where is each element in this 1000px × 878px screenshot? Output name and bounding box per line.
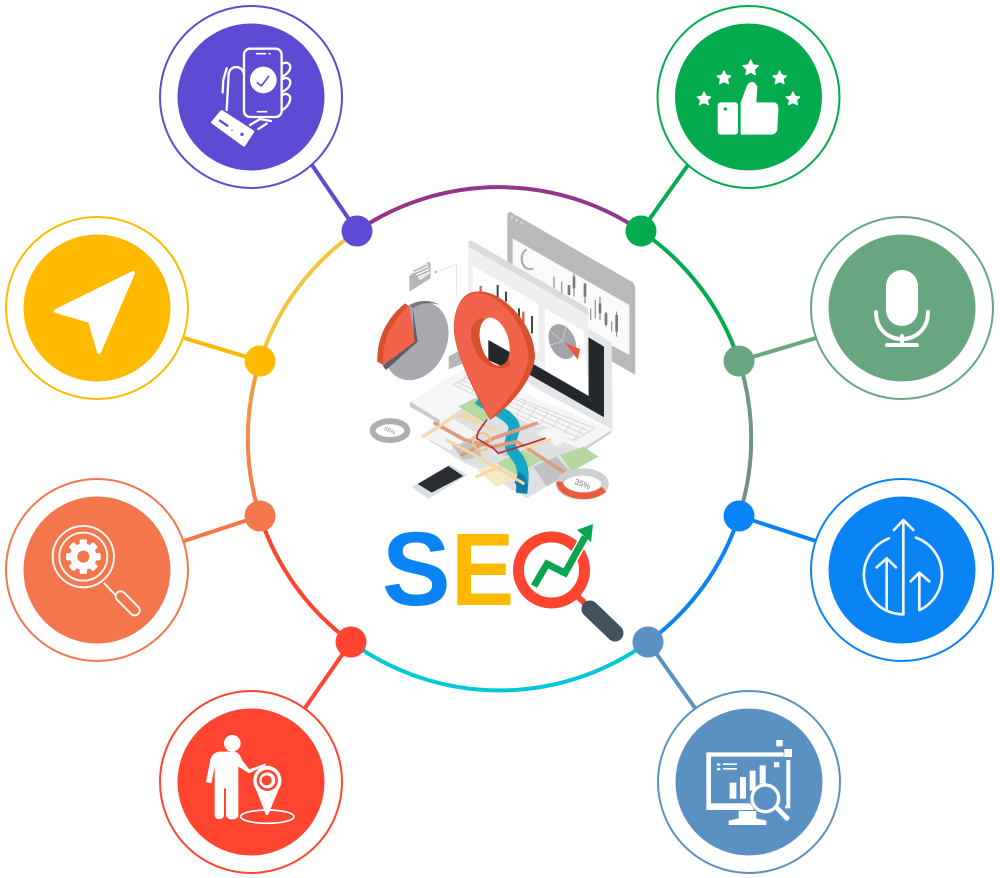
icon: person touching a map pin: [206, 735, 294, 823]
icon: microphone: [876, 270, 928, 345]
front analytics window: [468, 241, 589, 396]
icon: magnifier with gear: [53, 526, 142, 617]
fold-out street map: [420, 397, 598, 498]
mini pie chart: [543, 320, 582, 364]
node: orange gear search: [6, 479, 276, 661]
node: red person with location pin: [160, 626, 366, 873]
left pie chart: [371, 291, 461, 391]
node: blue growth arrows: [724, 479, 993, 661]
doughnut 65 percent: 65%: [383, 426, 397, 437]
laptop lid and dark screen: [483, 328, 613, 430]
icon: hand holding phone with check mark: [213, 49, 290, 145]
laptop base with keyboard: [410, 368, 612, 472]
SEO logo: [382, 511, 615, 633]
envelope icons: [409, 262, 463, 369]
illustration: isometric laptop, map and location pin: [371, 212, 635, 499]
doughnut 35 percent: 35%: [573, 477, 592, 491]
magnifying-glass letter O: O: [510, 512, 592, 629]
icon: thumbs up with five stars: [697, 60, 800, 134]
magnifier handle: [577, 596, 615, 633]
magnifier ring over the letter O: [518, 537, 584, 603]
doughnut 65 percent: [373, 421, 407, 440]
icon: monitor with bar chart and magnifier: [706, 740, 792, 825]
green growth arrow: [534, 524, 593, 586]
back analytics window: [507, 212, 635, 374]
node: green thumbs up: [626, 6, 840, 246]
smartphone: [412, 464, 467, 499]
node: yellow navigation: [6, 217, 276, 399]
central ring made of coloured arcs: [248, 187, 751, 690]
node: purple phone: [160, 6, 372, 246]
letter S: S: [382, 511, 451, 628]
icon: three up arrows in a circle: [864, 520, 942, 614]
doughnut 35 percent: [560, 472, 605, 496]
node: sage microphone: [724, 217, 993, 399]
icon: navigation arrow: [56, 273, 133, 352]
letter E: E: [451, 511, 514, 627]
node: steel blue analytics monitor: [632, 626, 840, 873]
location pin: [454, 291, 535, 420]
